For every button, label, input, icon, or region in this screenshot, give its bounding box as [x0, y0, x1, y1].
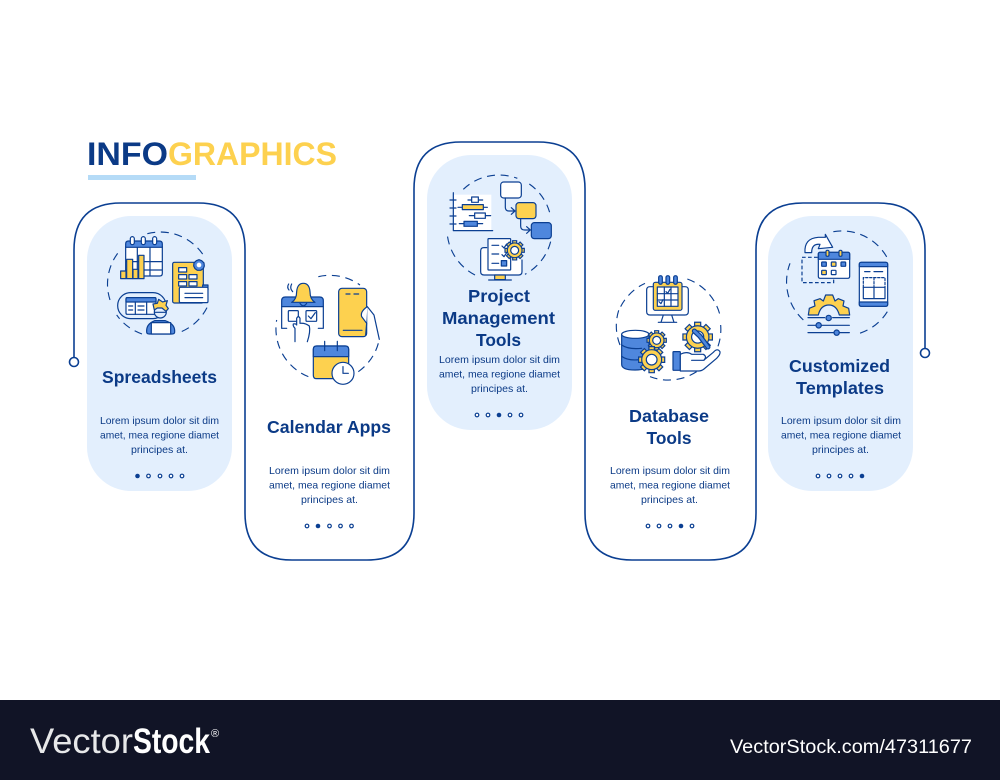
panel: calendar apps — [267, 275, 391, 528]
text: project management tools: amet, mea regione diamet — [439, 368, 560, 380]
text: customized templates: amet, mea regione diamet — [781, 430, 901, 442]
text: spreadsheets — [100, 415, 219, 456]
heading: calendar apps: Calendar Apps — [267, 417, 391, 437]
heading: customized templates — [789, 356, 890, 398]
text: customized templates — [781, 415, 901, 456]
heading: database tools — [629, 406, 709, 448]
text: spreadsheets: principes at. — [131, 444, 188, 456]
text: project management tools — [439, 354, 560, 395]
footer logo: Stock — [133, 722, 210, 761]
text: customized templates: Lorem ipsum dolor sit dim — [781, 415, 901, 427]
panel: project management tools — [427, 155, 572, 430]
heading: project management tools: Tools — [476, 330, 521, 350]
text: database tools: Lorem ipsum dolor sit dim — [610, 465, 730, 477]
pagination dots — [135, 474, 184, 478]
heading: customized templates: Customized — [789, 356, 890, 376]
heading: customized templates: Templates — [796, 378, 884, 398]
text: spreadsheets: amet, mea regione diamet — [100, 430, 219, 442]
title — [87, 136, 337, 172]
text: database tools: principes at. — [641, 494, 698, 506]
title underline — [88, 175, 196, 180]
text: database tools: amet, mea regione diamet — [610, 480, 730, 492]
title: INFO — [87, 136, 168, 172]
text: project management tools: principes at. — [471, 383, 528, 395]
heading: database tools: Tools — [646, 428, 692, 448]
footer logo: ® — [211, 728, 219, 740]
pagination dots — [646, 524, 694, 528]
panel: database tools — [610, 276, 730, 528]
panel: spreadsheets — [87, 216, 232, 491]
text: customized templates: principes at. — [812, 444, 869, 456]
title: GRAPHICS — [168, 136, 337, 172]
text: calendar apps: Lorem ipsum dolor sit dim — [269, 465, 390, 477]
icon: calendar apps — [276, 275, 379, 384]
footer logo — [30, 722, 219, 761]
text: spreadsheets: Lorem ipsum dolor sit dim — [100, 415, 219, 427]
icon: spreadsheets — [108, 232, 208, 334]
heading: project management tools: Management — [442, 308, 555, 328]
text: calendar apps: principes at. — [301, 494, 358, 506]
footer bar — [0, 700, 1000, 780]
text: calendar apps: amet, mea regione diamet — [269, 480, 390, 492]
text: calendar apps — [269, 465, 390, 506]
pagination dots — [305, 524, 353, 528]
connecting outline — [70, 142, 930, 560]
heading: database tools: Database — [629, 406, 709, 426]
icon: project management tools — [447, 175, 551, 280]
heading: spreadsheets: Spreadsheets — [102, 367, 217, 387]
panel: customized templates — [768, 216, 913, 491]
footer logo: Vector — [30, 722, 133, 761]
icon: database tools — [616, 276, 721, 380]
pagination dots — [816, 474, 864, 478]
icon: customized templates — [787, 231, 888, 335]
text: database tools — [610, 465, 730, 506]
text: project management tools: Lorem ipsum dolor sit dim — [439, 354, 560, 366]
heading: project management tools — [442, 286, 555, 350]
pagination dots — [475, 413, 523, 417]
heading: project management tools: Project — [468, 286, 530, 306]
footer image id: VectorStock.com/47311677 — [730, 737, 972, 758]
